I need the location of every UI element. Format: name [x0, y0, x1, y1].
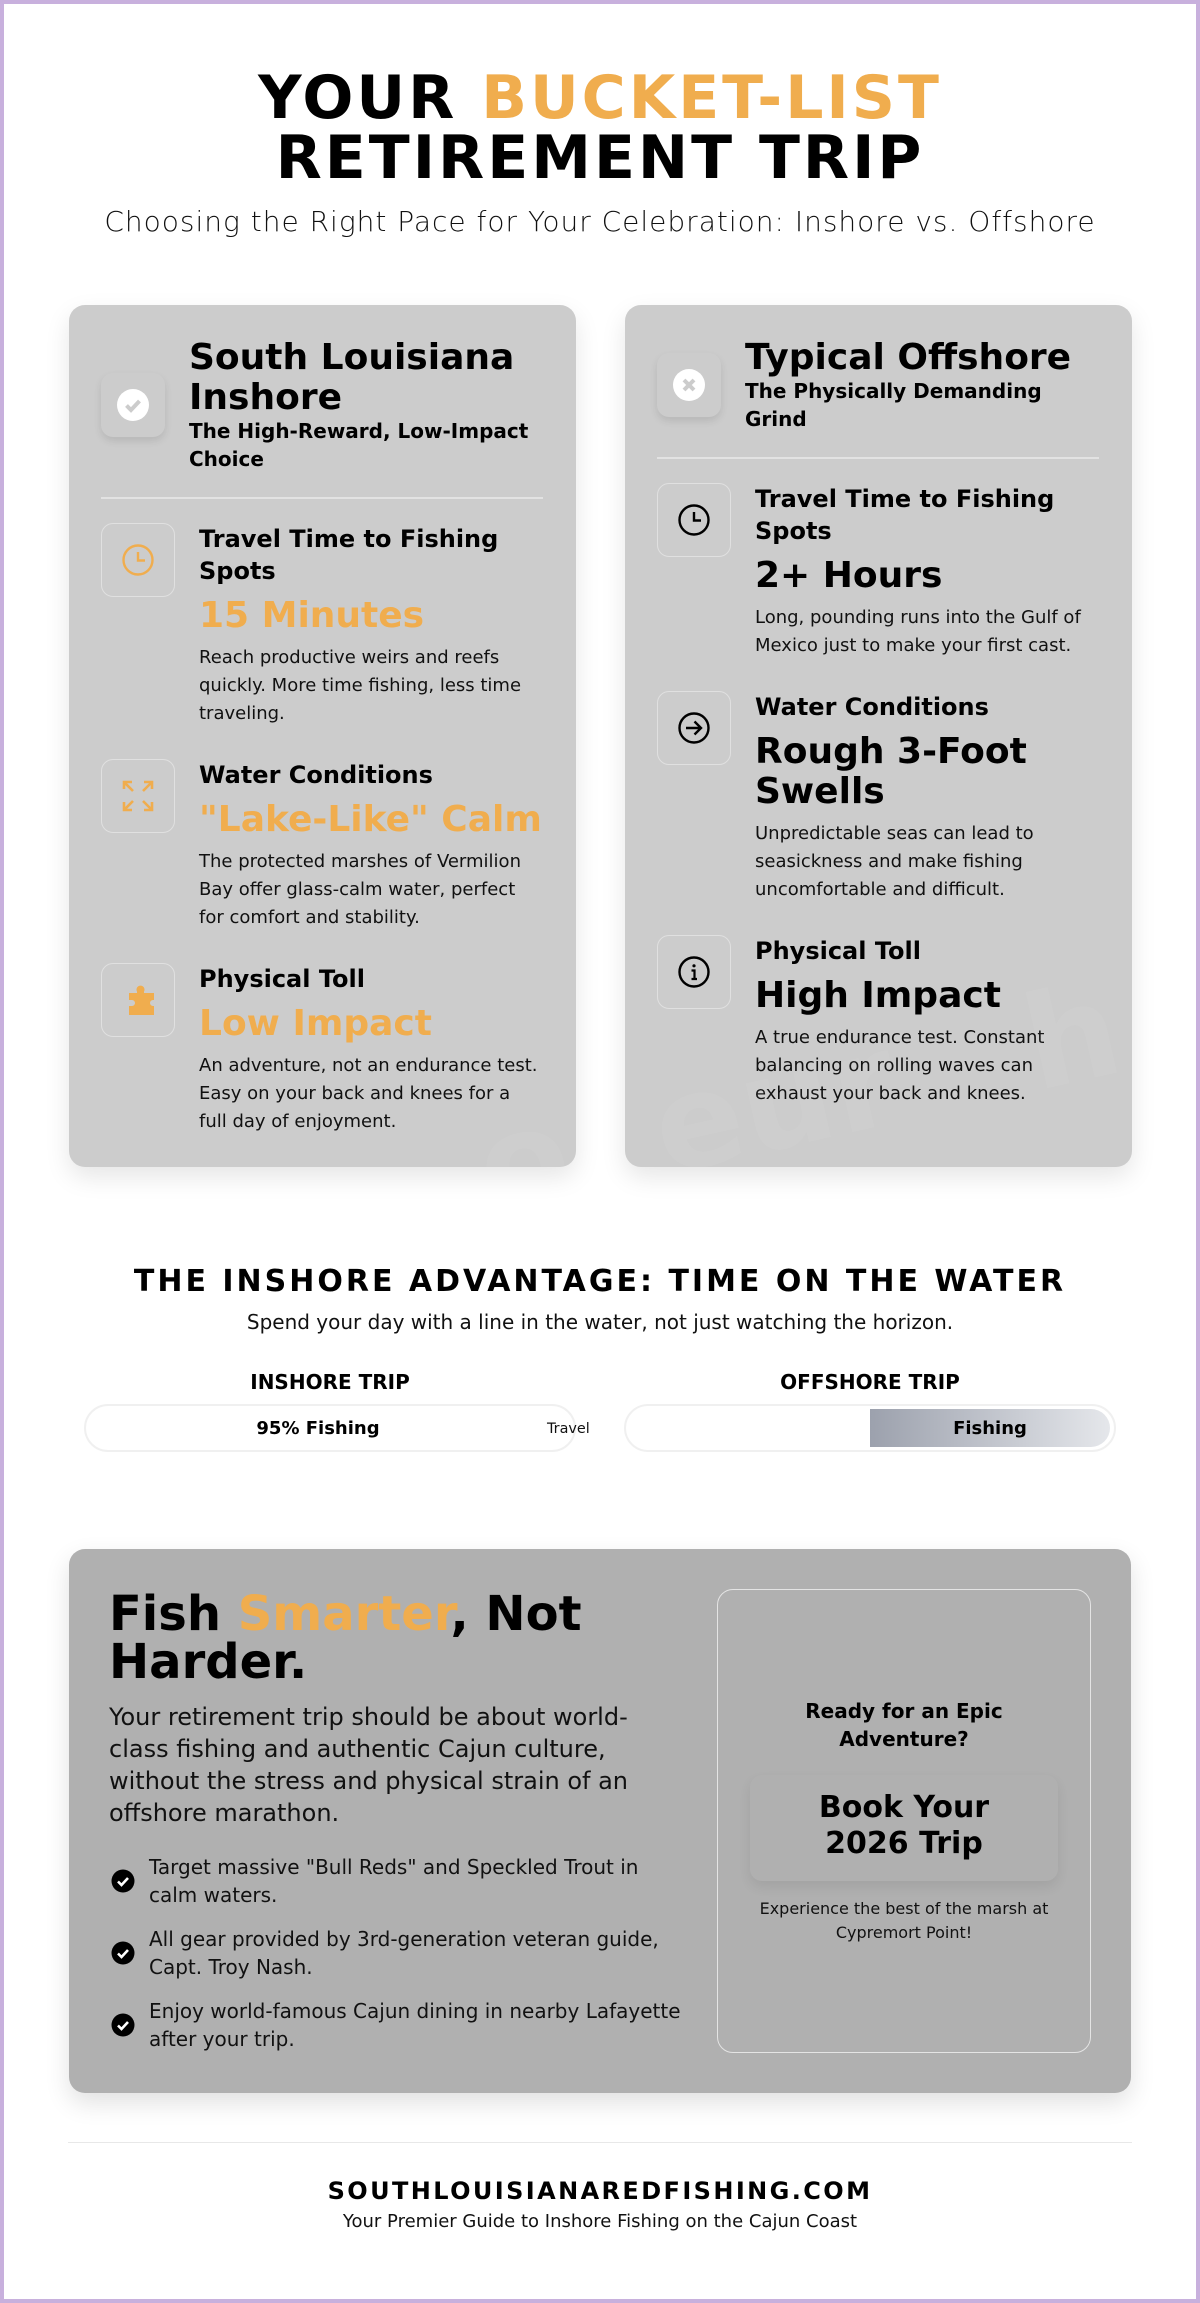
benefit 2 — [112, 1927, 659, 1979]
feature text: exhaust your back and knees. — [755, 1082, 1026, 1104]
CTA heading — [109, 1586, 582, 1690]
card heading: Typical Offshore — [745, 337, 1071, 378]
card heading: South Louisiana — [189, 337, 514, 378]
title: YOUR BUCKET-LIST — [258, 63, 942, 133]
booking box — [717, 1589, 1091, 2053]
chart: offshore bar — [624, 1404, 1116, 1452]
feature: travel time — [101, 523, 521, 724]
booking prompt: Adventure? — [839, 1726, 969, 1750]
CTA paragraph: without the stress and physical strain of an — [109, 1767, 628, 1795]
feature text: A true endurance test. Constant — [755, 1026, 1044, 1048]
divider right — [657, 457, 1099, 459]
feature: physical toll — [101, 963, 538, 1132]
fishing share fill: Fishing — [953, 1418, 1027, 1439]
feature text: seasickness and make fishing — [755, 850, 1023, 872]
chart: inshore bar — [84, 1404, 576, 1452]
feature text: An adventure, not an endurance test. — [199, 1054, 538, 1076]
section subtitle: Spend your day with a line in the water, not just watching the horizon. — [247, 1310, 953, 1334]
button: book trip: Book Your — [819, 1790, 989, 1825]
footer divider — [68, 2142, 1132, 2143]
icon: info circle — [657, 935, 731, 1009]
feature: water conditions — [101, 759, 542, 928]
card subheading: Grind — [745, 407, 807, 431]
card subheading — [745, 379, 1042, 431]
feature text: uncomfortable and difficult. — [755, 878, 1005, 900]
benefit list — [112, 1855, 681, 2051]
title — [258, 63, 942, 193]
feature text — [755, 937, 1044, 1104]
benefit 1: Target massive "Bull Reds" and Speckled Trout in — [149, 1855, 638, 1879]
booking note: Experience the best of the marsh at — [760, 1899, 1048, 1918]
feature text: High Impact — [755, 975, 1001, 1016]
card subheading: Choice — [189, 447, 264, 471]
feature text: Reach productive weirs and reefs — [199, 646, 499, 668]
feature text — [755, 485, 1082, 656]
feature text: Low Impact — [199, 1003, 432, 1044]
CTA heading: Harder. — [109, 1634, 307, 1690]
benefit 1 — [112, 1855, 638, 1907]
feature: travel time — [657, 483, 1082, 656]
booking note: Cypremort Point! — [836, 1923, 972, 1942]
feature text: Long, pounding runs into the Gulf of — [755, 606, 1081, 628]
section heading: THE INSHORE ADVANTAGE: TIME ON THE WATER — [134, 1264, 1066, 1299]
booking prompt — [805, 1699, 1003, 1750]
feature text: Physical Toll — [755, 937, 921, 965]
card heading: Inshore — [189, 377, 342, 418]
panel: Typical Offshore — [625, 305, 1132, 1167]
card subheading: The High-Reward, Low-Impact — [189, 419, 528, 443]
icon: check badge — [101, 373, 165, 437]
feature text: Rough 3-Foot — [755, 731, 1027, 772]
card heading — [189, 337, 514, 418]
icon: expand arrows — [101, 759, 175, 833]
icon: puzzle piece — [101, 963, 175, 1037]
benefit 3 — [112, 1999, 681, 2051]
feature text: Water Conditions — [199, 761, 433, 789]
footer site name: SOUTHLOUISIANAREDFISHING.COM — [328, 2177, 872, 2205]
icon: arrow circle — [657, 691, 731, 765]
footer tagline: Your Premier Guide to Inshore Fishing on the Cajun Coast — [343, 2211, 857, 2232]
CTA paragraph: Your retirement trip should be about world- — [109, 1703, 628, 1731]
feature text: quickly. More time fishing, less time — [199, 674, 521, 696]
feature: physical toll — [657, 935, 1044, 1104]
feature text: Easy on your back and knees for a — [199, 1082, 510, 1104]
feature text: Swells — [755, 771, 885, 812]
chart: offshore label: OFFSHORE TRIP — [780, 1370, 960, 1394]
button: book trip: 2026 Trip — [825, 1826, 983, 1861]
benefit 2: Capt. Troy Nash. — [149, 1955, 313, 1979]
icon: clock — [657, 483, 731, 557]
travel share label: Travel — [547, 1421, 590, 1437]
icon: clock — [101, 523, 175, 597]
feature text: full day of enjoyment. — [199, 1110, 396, 1132]
benefit 2: All gear provided by 3rd-generation veteran guide, — [149, 1927, 659, 1951]
decorative watermark: o eur h — [463, 952, 1134, 1244]
chart: inshore label: INSHORE TRIP — [250, 1370, 410, 1394]
feature text: Travel Time to Fishing — [755, 485, 1054, 513]
feature text: Unpredictable seas can lead to — [755, 822, 1034, 844]
CTA paragraph — [109, 1703, 628, 1827]
feature text: Spots — [199, 557, 276, 585]
benefit 3: Enjoy world-famous Cajun dining in nearby Lafayette — [149, 1999, 681, 2023]
panel: call to action — [69, 1549, 1131, 2093]
fishing share fill — [870, 1409, 1110, 1447]
feature text: Bay offer glass-calm water, perfect — [199, 878, 515, 900]
button: book trip — [750, 1775, 1058, 1881]
feature: water conditions — [657, 691, 1034, 900]
card subheading: The Physically Demanding — [745, 379, 1042, 403]
feature text: 15 Minutes — [199, 595, 424, 636]
feature text: Travel Time to Fishing — [199, 525, 498, 553]
feature text: 2+ Hours — [755, 555, 942, 596]
CTA heading: Fish Smarter, Not — [109, 1586, 582, 1642]
feature text: for comfort and stability. — [199, 906, 420, 928]
booking prompt: Ready for an Epic — [805, 1699, 1003, 1723]
feature text — [198, 761, 542, 928]
feature text — [199, 965, 538, 1132]
feature text: Physical Toll — [199, 965, 365, 993]
feature text: Spots — [755, 517, 832, 545]
card subheading — [189, 419, 528, 471]
panel: South Louisiana Inshore — [69, 305, 576, 1167]
fishing share label: 95% Fishing — [256, 1418, 380, 1439]
feature text: traveling. — [199, 702, 285, 724]
feature text: balancing on rolling waves can — [755, 1054, 1033, 1076]
title: RETIREMENT TRIP — [276, 123, 924, 193]
feature text — [755, 693, 1034, 900]
feature text: The protected marshes of Vermilion — [199, 850, 521, 872]
subtitle: Choosing the Right Pace for Your Celebration: Inshore vs. Offshore — [104, 205, 1096, 238]
feature text — [199, 525, 521, 724]
benefit 3: after your trip. — [149, 2027, 295, 2051]
benefit 1: calm waters. — [149, 1883, 277, 1907]
feature text: Mexico just to make your first cast. — [755, 634, 1071, 656]
icon: x badge — [657, 353, 721, 417]
feature text: "Lake-Like" Calm — [199, 799, 542, 840]
booking note — [760, 1899, 1048, 1942]
CTA paragraph: class fishing and authentic Cajun culture, — [109, 1735, 606, 1763]
feature text: Water Conditions — [755, 693, 989, 721]
CTA paragraph: offshore marathon. — [109, 1799, 339, 1827]
divider left — [101, 497, 543, 499]
